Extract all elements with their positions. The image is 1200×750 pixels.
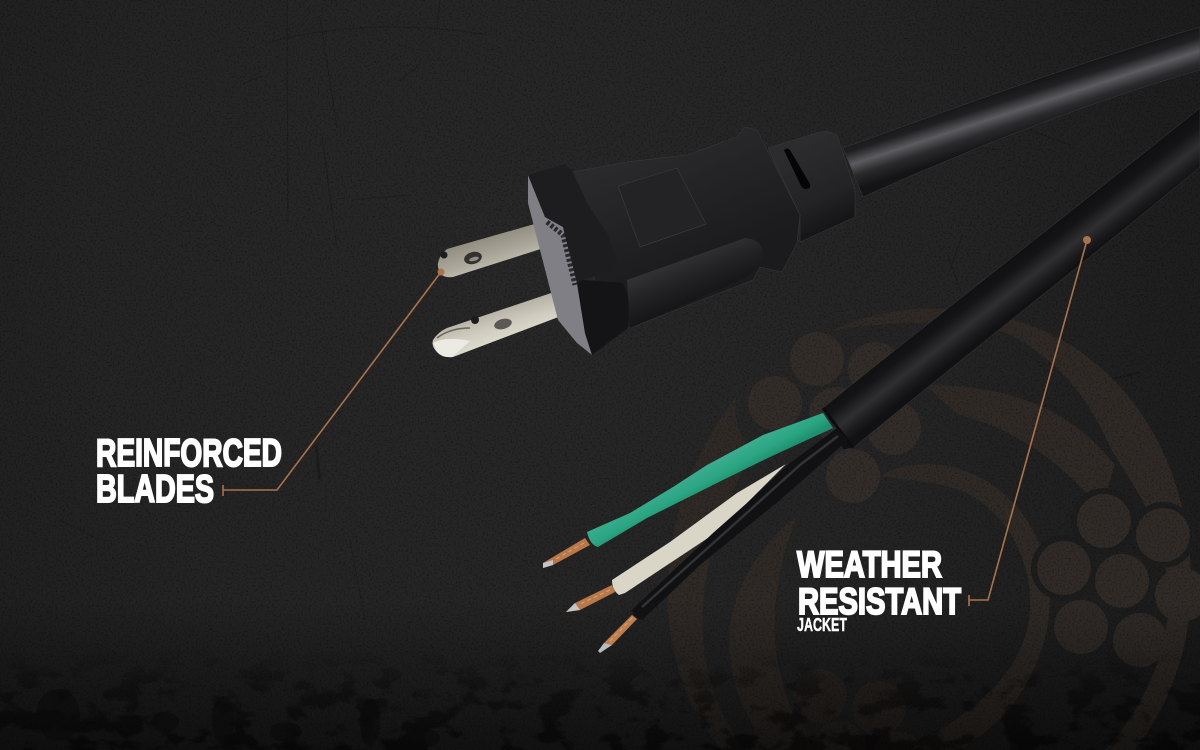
watermark: swirl logo with circles (668, 309, 1200, 750)
callout: reinforced blades (96, 268, 444, 511)
label text (96, 432, 282, 511)
plug face (528, 175, 592, 355)
bottom grunge (0, 650, 1200, 750)
conductors (543, 413, 848, 653)
prong: top blade (438, 221, 547, 277)
leader line (969, 236, 1091, 606)
circle cluster: right (1031, 488, 1200, 667)
plug prongs (432, 221, 577, 357)
label text: WEATHER (797, 544, 942, 585)
wire: white (566, 464, 786, 612)
grip lens (627, 238, 763, 328)
callout: weather resistant jacket (797, 236, 1091, 635)
plug body (528, 127, 800, 355)
prong: bottom blade (432, 285, 577, 357)
molded label plate (618, 168, 706, 247)
power cord (843, 27, 1200, 197)
face lettering band (547, 222, 575, 285)
flange top (528, 164, 617, 283)
label text (797, 544, 961, 635)
plug body main (573, 127, 800, 328)
flange bottom (577, 280, 629, 355)
collar (768, 131, 855, 242)
label text: BLADES (96, 468, 214, 511)
label text: JACKET (797, 615, 847, 635)
label text: RESISTANT (798, 581, 961, 622)
label text: REINFORCED (96, 432, 282, 475)
wire: green (543, 413, 833, 568)
background scratches (60, 0, 1140, 620)
leader line (223, 268, 444, 496)
sheathed jacket cable (823, 108, 1200, 450)
wire: black (598, 428, 848, 653)
